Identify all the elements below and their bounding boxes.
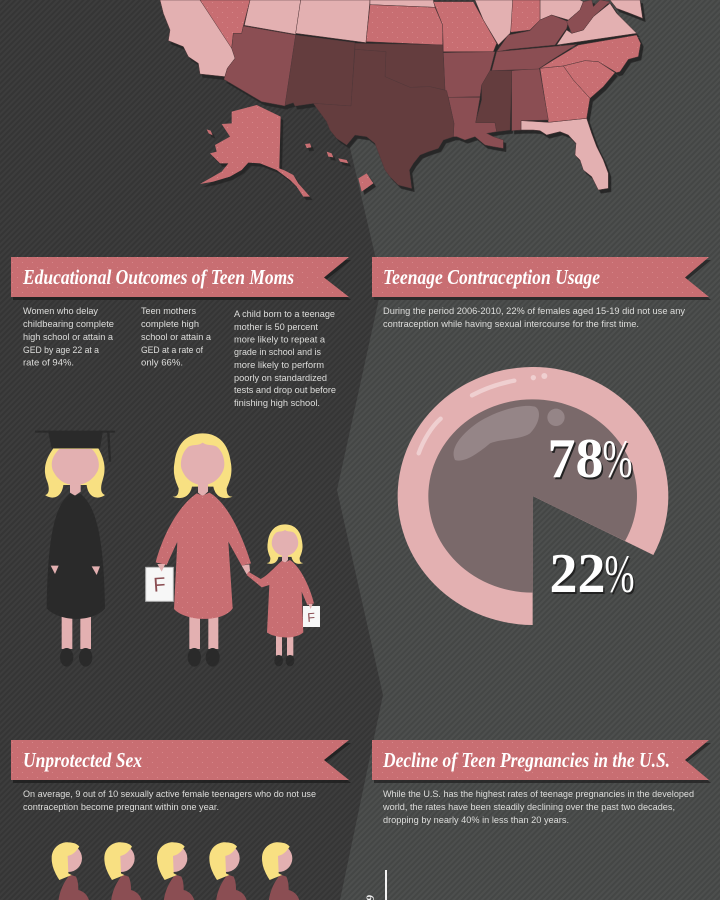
text: decline description: world, the rates have been steadily declining over the past two decades,: [382, 801, 675, 812]
text: unprotected sex description: On average, 9 out of 10 sexually active female teenagers who do not use: [23, 788, 316, 799]
figure: pregnant teen 2: [104, 842, 142, 900]
figure: pregnant teen 1: [52, 842, 89, 900]
banner: unprotected sex: Unprotected Sex: [23, 748, 142, 772]
text: contraception description: During the period 2006-2010, 22% of females aged 15-19 did not use any: [383, 305, 685, 316]
banner: contraception usage: [372, 257, 711, 300]
text: a child born: mother is 50 percent: [234, 321, 318, 332]
label: 78 percent: %: [604, 431, 634, 491]
label: 22 percent: 22: [550, 543, 606, 605]
text: decline description: While the U.S. has the highest rates of teenage pregnancies in the developed: [383, 788, 694, 799]
text: a child born: finishing high school.: [234, 397, 320, 408]
text: unprotected sex description: contraception become pregnant within one year.: [23, 801, 219, 812]
section: decline of teen pregnancies: [363, 740, 711, 900]
paper: small F grade: F: [307, 610, 316, 625]
label: 22 percent: 22: [551, 545, 607, 607]
text: a child born: more likely to repeat a: [234, 334, 326, 344]
figure: teen mother: [146, 433, 251, 667]
label: 22 percent: %: [604, 544, 634, 604]
text: teen mothers: only 66%.: [141, 356, 183, 368]
text: women who delay: [23, 305, 114, 368]
banner: decline of teen pregnancies: [372, 740, 711, 783]
text: decline description: dropping by nearly 40% in less than 20 years.: [383, 814, 569, 825]
chart axis: [385, 870, 387, 900]
text: teen mothers: complete high: [141, 318, 199, 329]
text: teen mothers: school or attain a: [141, 331, 212, 342]
text: teen mothers: Teen mothers: [141, 305, 196, 316]
banner: unprotected sex: [11, 740, 351, 783]
text: women who delay: childbearing complete: [23, 318, 114, 329]
text: women who delay: high school or attain a: [23, 331, 114, 342]
map of the United States: [160, 0, 643, 197]
state group: medium: [200, 0, 641, 197]
figure: child: [247, 524, 320, 666]
text: teen mothers: GED at a rate of: [141, 344, 203, 355]
paper: large F grade: [146, 564, 173, 601]
text: women who delay: GED by age 22 at a: [23, 344, 100, 355]
state group: darkest: [285, 35, 512, 188]
pie chart: 78 and 22 percent: [398, 367, 668, 625]
section: educational outcomes: [11, 257, 351, 667]
text: a child born: more likely to perform: [234, 359, 324, 370]
text: unprotected sex description: [23, 788, 316, 812]
text: teen mothers: [141, 305, 212, 368]
text: a child born: poorly on standardized: [234, 372, 327, 383]
section: unprotected sex: [11, 740, 351, 900]
state group: dark: [224, 0, 610, 148]
paper: small F grade: [303, 604, 320, 627]
text: women who delay: Women who delay: [23, 305, 98, 316]
label: 78 percent: 78: [549, 430, 605, 492]
label: 78 percent: [548, 428, 634, 492]
paper: large F grade: F: [153, 574, 166, 597]
label: 78 percent: %: [602, 429, 632, 489]
banner: decline of teen pregnancies: Decline of Teen Pregnancies in the U.S.: [382, 748, 670, 772]
banner: educational outcomes: Educational Outcomes of Teen Moms: [22, 265, 294, 289]
text: decline description: [382, 788, 694, 825]
text: contraception description: [383, 305, 685, 329]
text: a child born: grade in school and is: [234, 346, 321, 357]
label: 22 percent: %: [606, 546, 636, 606]
text: a child born: tests and drop out before: [234, 384, 336, 395]
figure: pregnant teen 3: [157, 842, 195, 900]
text: women who delay: rate of 94%.: [23, 356, 74, 368]
text: contraception description: contraception while having sexual intercourse for the first time.: [383, 318, 639, 329]
illustration: graduate and teen mother with child: [35, 431, 320, 667]
label: 22 percent: [550, 543, 636, 607]
text: a child born: A child born to a teenage: [234, 308, 335, 319]
figure: pregnant teen 4: [209, 842, 247, 900]
pictogram: pregnant teenagers: [52, 842, 300, 900]
text: a child born: [234, 308, 336, 408]
banner: contraception usage: Teenage Contraception Usage: [383, 265, 600, 289]
figure: pregnant teen 5: [262, 842, 300, 900]
banner: educational outcomes: [11, 257, 351, 300]
figure: graduate: [35, 431, 115, 667]
section: contraception usage: [372, 257, 711, 625]
label: 78 percent: 78: [548, 428, 604, 490]
state group: light: [160, 0, 643, 190]
